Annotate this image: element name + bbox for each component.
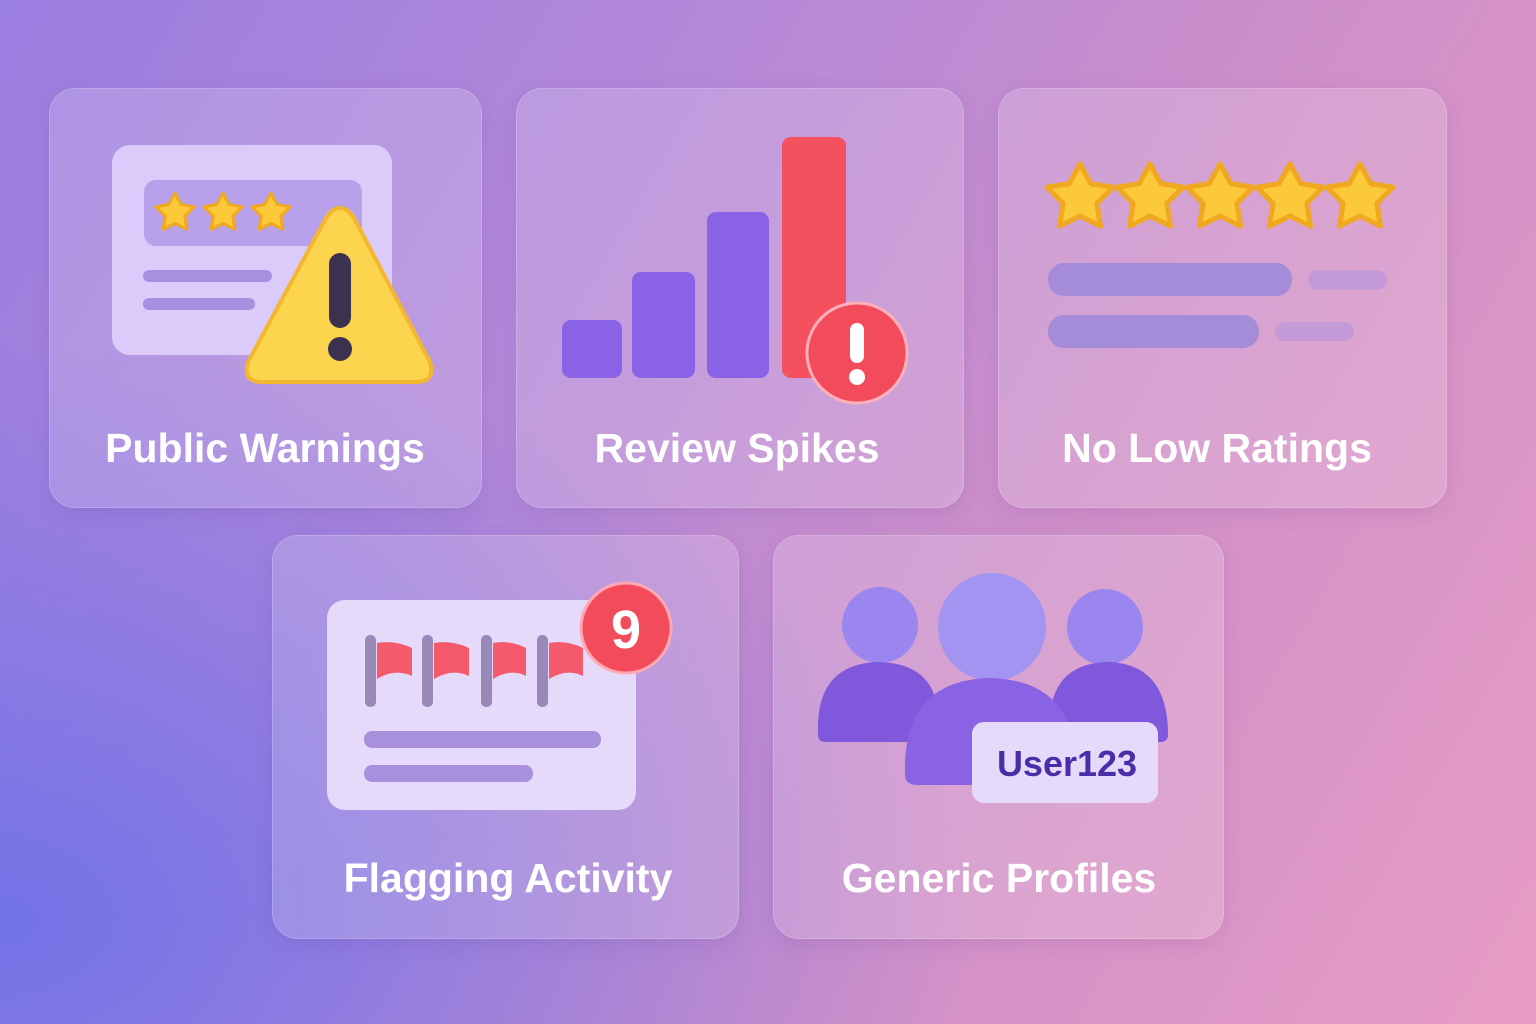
card: public warnings — [49, 88, 482, 508]
icon: user profiles: User123 — [997, 743, 1137, 784]
icon: bar chart spike — [562, 137, 907, 403]
card: generic profiles — [773, 535, 1224, 939]
label: Generic Profiles: Generic Profiles — [842, 855, 1156, 901]
label: No Low Ratings: No Low Ratings — [1062, 425, 1372, 471]
icon: flags panel with badge: 9 — [611, 600, 641, 660]
icon: flags panel with badge — [327, 583, 671, 810]
card: review spikes — [516, 88, 964, 508]
icon: review card with warning — [112, 145, 431, 382]
icon: user profiles — [818, 573, 1168, 803]
label: Review Spikes: Review Spikes — [595, 425, 879, 471]
icon: five stars with lines — [1047, 164, 1393, 348]
card: no low ratings — [998, 88, 1447, 508]
label: Flagging Activity: Flagging Activity — [344, 855, 673, 901]
card: flagging activity — [272, 535, 739, 939]
label: Public Warnings: Public Warnings — [105, 425, 425, 471]
